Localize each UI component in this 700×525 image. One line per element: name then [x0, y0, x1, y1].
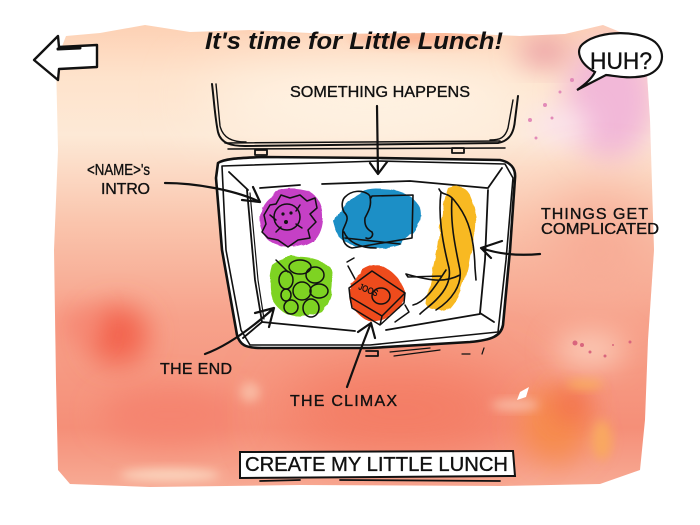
food: blue sandwich: [334, 188, 421, 248]
lid of the box: [212, 84, 518, 149]
food: grapes: [269, 257, 332, 317]
label: the climax: [290, 323, 397, 410]
food: banana: [406, 186, 476, 314]
label: something happens: SOMETHING HAPPENS: [290, 84, 470, 101]
label: name intro: [87, 162, 260, 202]
food: juice box: [347, 258, 409, 325]
speech bubble: HUH?: HUH?: [590, 48, 652, 75]
label: the climax: THE CLIMAX: [290, 393, 397, 410]
arrow: the end: [205, 308, 274, 354]
button: create my little lunch: CREATE MY LITTLE LUNCH: [245, 454, 508, 476]
food: flower: [260, 189, 323, 247]
label: things get complicated: COMPLICATED: [541, 221, 659, 238]
title: It's time for Little Lunch!: [205, 28, 503, 55]
label: name intro: INTRO: [101, 181, 150, 198]
box body: [216, 148, 515, 356]
arrow: the climax: [347, 323, 375, 387]
label: the end: [160, 308, 274, 378]
speech bubble: HUH?: [577, 33, 662, 90]
button: create my little lunch: [240, 451, 515, 481]
back arrow: [34, 36, 97, 80]
food: juice box: JOOS: [357, 282, 380, 298]
lunchbox: [212, 84, 518, 356]
arrow: intro: [165, 183, 260, 202]
label: name intro: <NAME>'s: [87, 162, 150, 179]
label: the end: THE END: [160, 361, 232, 378]
label: something happens: [290, 84, 470, 174]
arrow: things get complicated: [481, 241, 540, 258]
label: things get complicated: [481, 206, 659, 258]
label: things get complicated: THINGS GET: [541, 206, 648, 223]
arrow: something happens: [370, 106, 387, 174]
